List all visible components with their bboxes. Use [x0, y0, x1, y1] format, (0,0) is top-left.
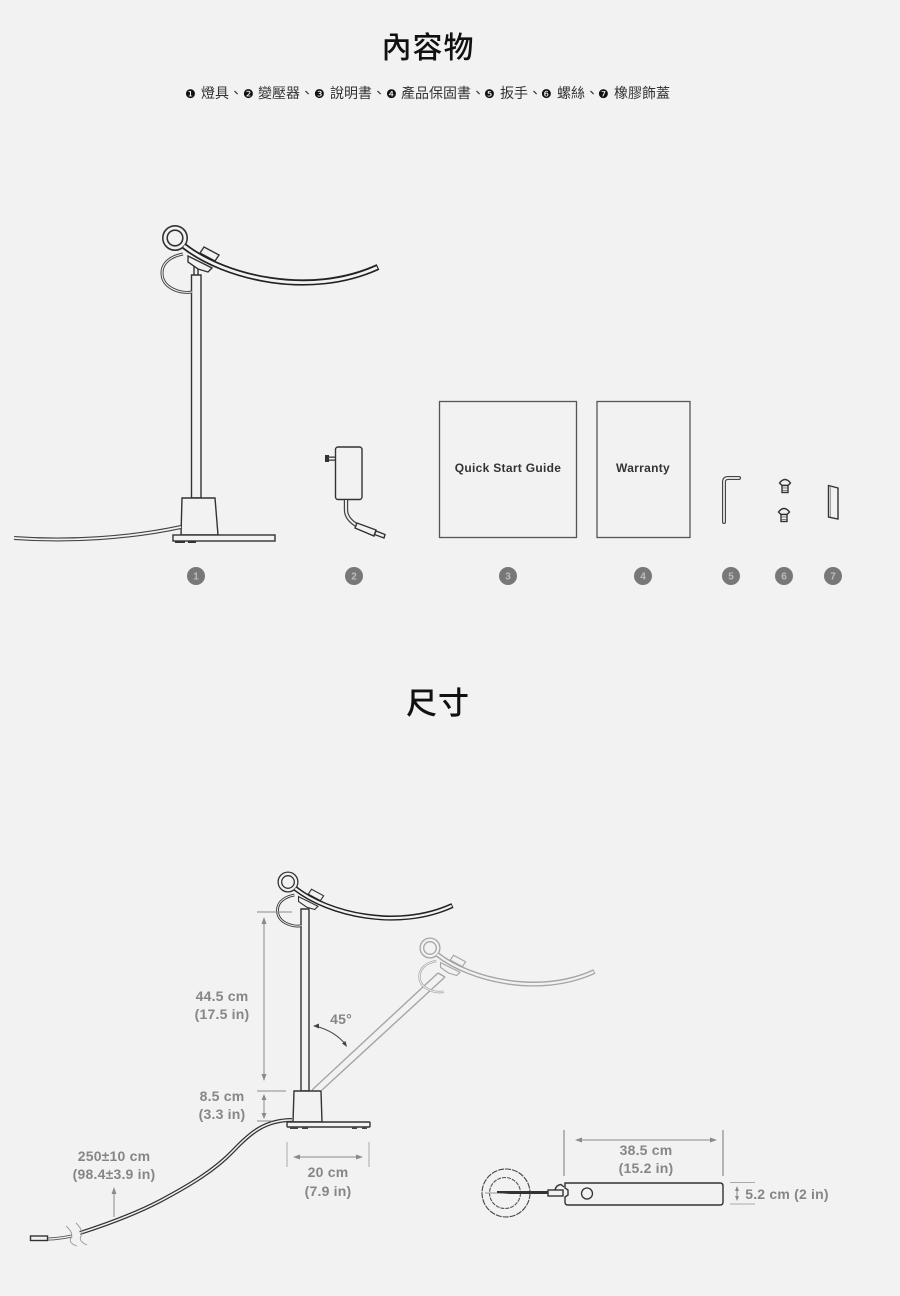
- item 4: warranty: Warranty: [616, 461, 670, 475]
- dimension: head length: (15.2 in): [619, 1160, 673, 1176]
- item number badges: [187, 567, 842, 585]
- dimension: base height: 8.5 cm: [200, 1088, 244, 1104]
- dimension: base height: (3.3 in): [199, 1106, 245, 1122]
- dimension: base height: [199, 1088, 286, 1122]
- dimension: cord length: (98.4±3.9 in): [73, 1166, 155, 1182]
- item 3: quick start guide: Quick Start Guide: [455, 461, 561, 475]
- item 5: hex wrench: [724, 478, 739, 522]
- contents list: 扳手、: [500, 85, 542, 101]
- dimension: head length: [564, 1130, 723, 1176]
- dimension: head width: [730, 1182, 829, 1204]
- item 3: quick start guide: [440, 402, 576, 538]
- item number badges: 2: [351, 572, 357, 582]
- dimension: 45 degree tilt arrow: [313, 1011, 352, 1047]
- contents list: ❶: [185, 87, 196, 101]
- ghost lamp tilted 45 degrees: [312, 940, 594, 1090]
- title: dimensions: 尺寸: [406, 686, 470, 721]
- contents list: ❷: [243, 87, 254, 101]
- item number badges: 7: [830, 572, 836, 582]
- dimension: pole height: 44.5 cm: [196, 988, 248, 1004]
- item 6: screws: [778, 480, 790, 522]
- item 4: warranty: [597, 402, 690, 538]
- dimension: base width: [287, 1142, 369, 1199]
- dimension: pole height: (17.5 in): [195, 1006, 249, 1022]
- contents list: ❺: [484, 87, 495, 101]
- dimension: head width: 5.2 cm (2 in): [745, 1186, 829, 1202]
- contents list: 產品保固書、: [401, 85, 485, 101]
- contents list: ❸: [314, 87, 325, 101]
- contents list: ❹: [386, 87, 397, 101]
- dimension: cord length: 250±10 cm: [78, 1148, 150, 1164]
- dimension: cord length: [73, 1148, 155, 1217]
- item number badges: 3: [505, 572, 511, 582]
- dimension: base width: 20 cm: [308, 1164, 348, 1180]
- contents list: 說明書、: [330, 85, 386, 101]
- item number badges: 6: [781, 572, 787, 582]
- contents list: 變壓器、: [258, 85, 314, 101]
- title: contents: 內容物: [382, 32, 474, 65]
- item number badges: 4: [640, 572, 646, 582]
- upright lamp with long cord: [30, 874, 452, 1246]
- contents list: 螺絲、: [557, 85, 599, 101]
- item 2: power adapter: [325, 447, 385, 538]
- dimension: pole height: [195, 912, 292, 1081]
- contents list: ❼: [598, 87, 609, 101]
- dimension: 45 degree tilt arrow: 45°: [330, 1011, 352, 1027]
- dimension: head length: 38.5 cm: [620, 1142, 672, 1158]
- item 7: rubber cover: [828, 486, 838, 519]
- contents list: 橡膠飾蓋: [614, 85, 670, 101]
- top view of lamp: [482, 1169, 723, 1217]
- item number badges: 5: [728, 572, 734, 582]
- item 1: desk lamp: [14, 228, 378, 543]
- item number badges: 1: [193, 572, 199, 582]
- dimension: base width: (7.9 in): [305, 1183, 351, 1199]
- contents list: ❻: [541, 87, 552, 101]
- contents list: 燈具、: [201, 85, 243, 101]
